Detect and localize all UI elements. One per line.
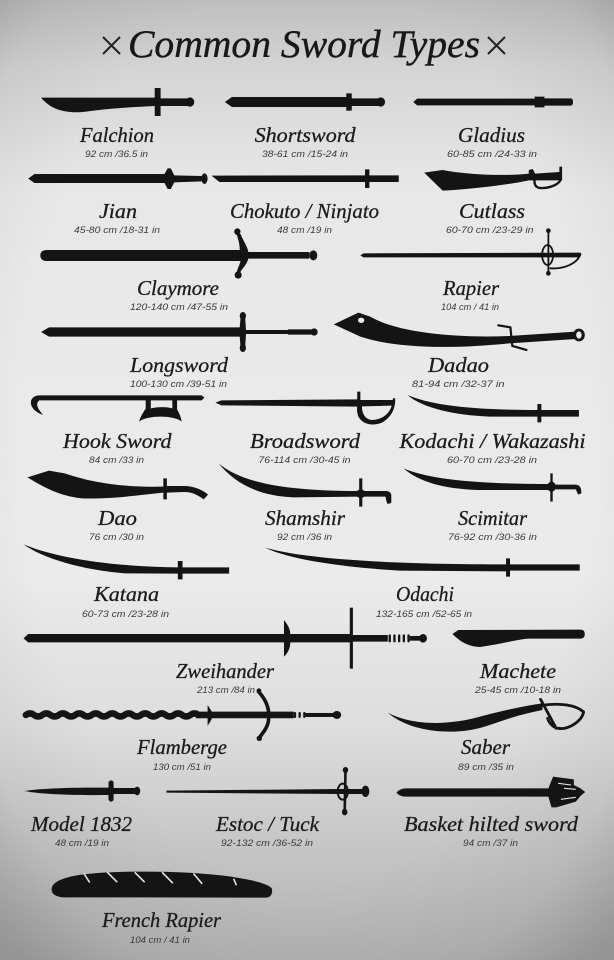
- sword: Jian: [28, 168, 208, 189]
- label: Estoc / Tuck: 92-132 cm /36-52 in: [221, 838, 313, 849]
- label: Cutlass: 60-70 cm /23-29 in: [446, 225, 534, 236]
- label: Jian: [74, 199, 160, 236]
- sword: Hook Sword: [31, 395, 204, 422]
- label: Saber: [458, 735, 514, 773]
- sword: Falchion: [41, 88, 194, 116]
- label: Scimitar: [448, 506, 537, 543]
- sword: Broadsword: [215, 392, 395, 425]
- label: French Rapier: [101, 908, 222, 946]
- label: Flamberge: [136, 735, 227, 773]
- label: Rapier: Rapier: [442, 276, 500, 300]
- label: Dadao: [412, 353, 504, 390]
- title text: Common Sword Types: [128, 23, 480, 66]
- label: Katana: Katana: [93, 582, 159, 606]
- label: Rapier: [441, 276, 500, 313]
- sword: Saber: [388, 699, 584, 732]
- label: Estoc / Tuck: [215, 812, 320, 849]
- label: Longsword: [129, 353, 229, 390]
- label: Shortsword: 38-61 cm /15-24 in: [262, 149, 348, 160]
- label: Zweihander: 213 cm /84 in: [196, 685, 255, 696]
- label: Jian: 45-80 cm /18-31 in: [74, 225, 160, 236]
- label: Machete: Machete: [479, 659, 556, 683]
- label: Dao: 76 cm /30 in: [89, 532, 144, 543]
- label: Cutlass: Cutlass: [459, 199, 525, 223]
- sword: Shortsword: [225, 93, 385, 111]
- label: Shamshir: 92 cm /36 in: [277, 532, 332, 543]
- label: Hook Sword: 84 cm /33 in: [89, 455, 144, 466]
- label: Longsword: Longsword: [129, 353, 229, 377]
- label: Claymore: [130, 276, 228, 313]
- label: Cutlass: [446, 199, 534, 236]
- label: Chokuto / Ninjato: Chokuto / Ninjato: [230, 199, 379, 223]
- sword: Model 1832: [24, 780, 140, 802]
- label: Scimitar: 76-92 cm /30-36 in: [448, 532, 537, 543]
- sword: Kodachi / Wakazashi: [407, 395, 579, 422]
- sword: Katana: [24, 544, 229, 579]
- label: Saber: 89 cm /35 in: [458, 762, 514, 773]
- label: Rapier: 104 cm / 41 in: [441, 302, 499, 313]
- label: Kodachi / Wakazashi: Kodachi / Wakazashi: [398, 429, 586, 453]
- label: Jian: Jian: [99, 199, 137, 223]
- label: Basket hilted sword: 94 cm /37 in: [463, 838, 518, 849]
- sword: Flamberge: [26, 688, 341, 741]
- sword: Dadao: [334, 313, 583, 350]
- label: Kodachi / Wakazashi: 60-70 cm /23-28 in: [447, 455, 537, 466]
- label: Gladius: 60-85 cm /24-33 in: [447, 149, 537, 160]
- label: Katana: [82, 582, 169, 620]
- label: Basket hilted sword: [404, 812, 579, 849]
- sword: Chokuto / Ninjato: [212, 169, 399, 188]
- sword: Shamshir: [219, 463, 391, 507]
- label: Shortsword: [255, 123, 356, 160]
- sword: Zweihander: [24, 608, 427, 669]
- sword: Claymore: [40, 228, 317, 279]
- label: Machete: [474, 659, 561, 696]
- label: Gladius: Gladius: [458, 123, 525, 147]
- sword: French Rapier (baguette): [52, 872, 272, 898]
- label: Longsword: 100-130 cm /39-51 in: [130, 379, 227, 390]
- label: Zweihander: [176, 659, 275, 696]
- label: Chokuto / Ninjato: [230, 199, 379, 236]
- sword: Basket hilted sword: [396, 777, 585, 807]
- label: Broadsword: 76-114 cm /30-45 in: [258, 455, 350, 466]
- label: Claymore: Claymore: [137, 276, 219, 300]
- label: Odachi: Odachi: [396, 582, 454, 606]
- label: Estoc / Tuck: Estoc / Tuck: [215, 812, 320, 836]
- label: Model 1832: 48 cm /19 in: [55, 838, 109, 849]
- label: Scimitar: Scimitar: [458, 506, 528, 530]
- sword: Cutlass: [424, 167, 562, 191]
- icon: crossed swords right: [488, 37, 505, 54]
- label: Katana: 60-73 cm /23-28 in: [82, 609, 169, 620]
- label: French Rapier: 104 cm / 41 in: [130, 935, 190, 946]
- label: Dadao: 81-94 cm /32-37 in: [412, 379, 504, 390]
- label: Odachi: 132-165 cm /52-65 in: [376, 609, 472, 620]
- label: Dao: Dao: [97, 506, 137, 530]
- label: Falchion: Falchion: [79, 123, 154, 147]
- label: Model 1832: Model 1832: [30, 812, 132, 836]
- label: Dao: [89, 506, 144, 543]
- label: Hook Sword: Hook Sword: [62, 429, 172, 453]
- label: Model 1832: [30, 812, 132, 849]
- label: Saber: Saber: [461, 735, 511, 759]
- label: Falchion: [79, 123, 154, 160]
- sword: Gladius: [413, 97, 573, 107]
- label: Broadsword: Broadsword: [250, 429, 361, 453]
- sword: Machete: [452, 630, 585, 647]
- label: Basket hilted sword: Basket hilted sword: [404, 812, 579, 836]
- sword: Estoc / Tuck: [166, 767, 369, 815]
- sword: Longsword: [41, 312, 318, 352]
- label: Shamshir: [265, 506, 346, 543]
- title: [103, 23, 505, 66]
- label: Zweihander: Zweihander: [176, 659, 275, 683]
- sword: Scimitar: [403, 468, 581, 502]
- label: Kodachi / Wakazashi: [398, 429, 586, 466]
- label: Claymore: 120-140 cm /47-55 in: [130, 302, 228, 313]
- label: French Rapier: French Rapier: [101, 908, 222, 932]
- label: Chokuto / Ninjato: 48 cm /19 in: [277, 225, 332, 236]
- label: Shamshir: Shamshir: [265, 506, 346, 530]
- label: Odachi: [376, 582, 472, 620]
- icon: crossed swords left: [103, 37, 120, 54]
- sword: Odachi: [265, 548, 580, 577]
- label: Broadsword: [250, 429, 361, 466]
- label: Machete: 25-45 cm /10-18 in: [474, 685, 561, 696]
- label: Falchion: 92 cm /36.5 in: [85, 149, 148, 160]
- label: Shortsword: Shortsword: [255, 123, 356, 147]
- label: Dadao: Dadao: [427, 353, 489, 377]
- label: Hook Sword: [62, 429, 172, 466]
- label: Flamberge: Flamberge: [136, 735, 227, 759]
- sword: Dao: [27, 471, 208, 499]
- label: Flamberge: 130 cm /51 in: [153, 762, 211, 773]
- label: Gladius: [447, 123, 537, 160]
- sword: Rapier: [360, 228, 580, 276]
